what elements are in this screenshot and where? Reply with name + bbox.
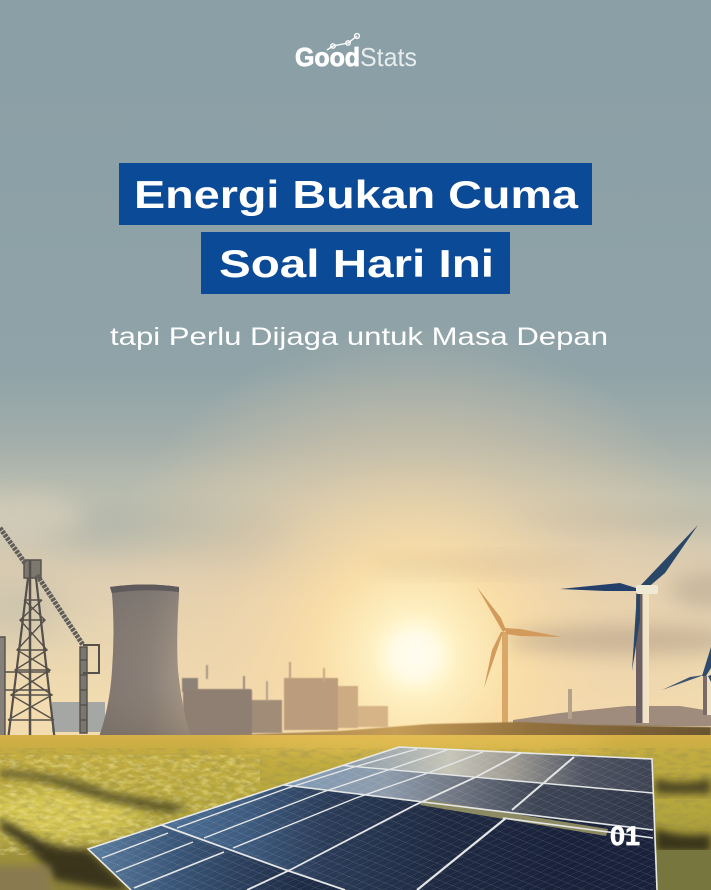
industrial buildings: [182, 662, 388, 736]
title line 1: [119, 163, 592, 225]
title line 2: Soal Hari Ini: [219, 243, 494, 286]
crop field: [0, 729, 711, 890]
page number: 01: [610, 821, 640, 851]
logo: GoodStats: [295, 34, 417, 72]
middle row: [268, 765, 653, 830]
wind turbine: middle: [477, 587, 562, 726]
far row: [338, 747, 653, 793]
hazy background building: [52, 702, 105, 732]
subtitle: tapi Perlu Dijaga untuk Masa Depan: [110, 323, 608, 351]
solar panels: [80, 745, 660, 890]
gold reflective bar: [420, 799, 608, 836]
distant hill: [513, 706, 711, 726]
logo: GoodStats: Stats: [360, 42, 417, 72]
wind turbine: right: [662, 647, 711, 715]
near row: [156, 783, 657, 890]
title line 1: Energi Bukan Cuma: [134, 174, 578, 217]
title line 2: [201, 232, 510, 294]
logo: GoodStats: Good: [295, 42, 360, 72]
cooling tower: [99, 584, 191, 737]
transmission pylon: [0, 528, 99, 742]
treeline: [185, 722, 711, 738]
icon: trend line: [327, 34, 359, 50]
left row: [88, 823, 345, 890]
small distant mast: [568, 689, 572, 719]
wind turbine: large: [560, 525, 698, 723]
